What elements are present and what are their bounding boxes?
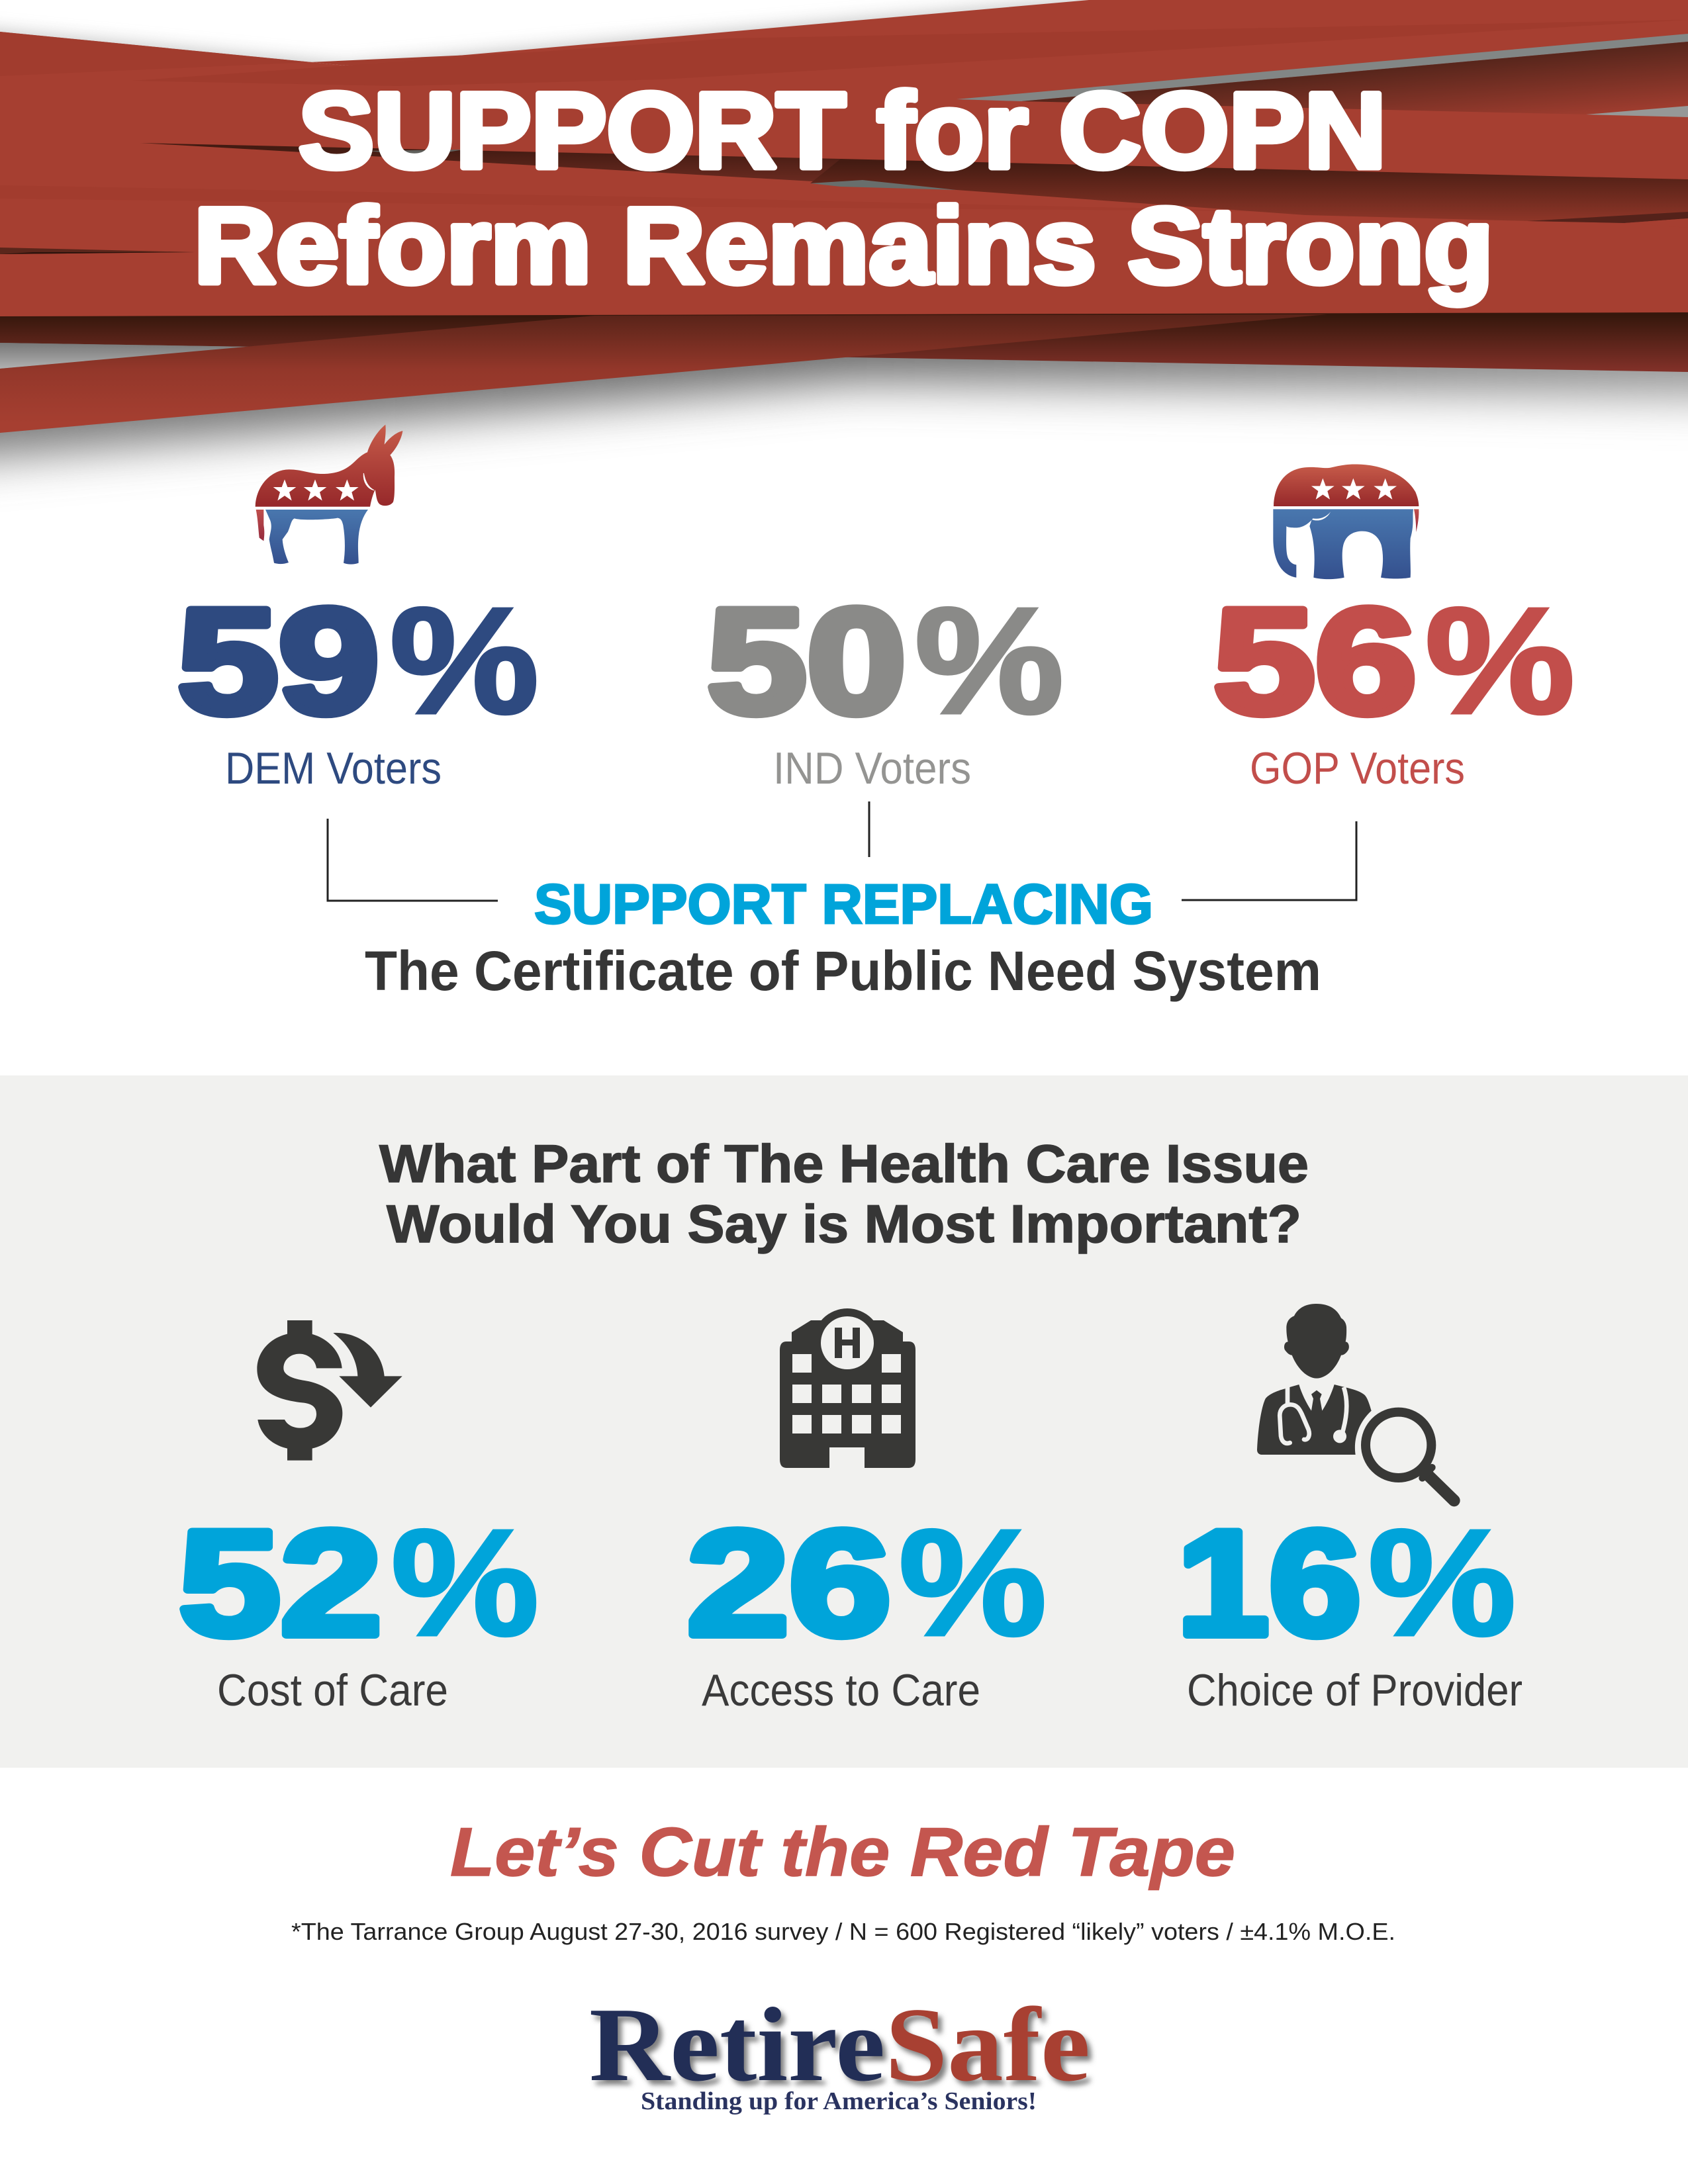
icon: hospital: [780, 1308, 915, 1468]
source footnote: *The Tarrance Group August 27-30, 2016 survey / N = 600 Registered “likely” voters / ±4.1% M.O.E.: [291, 1918, 1395, 1945]
stat: 16% choice of provider: [1177, 1499, 1523, 1715]
title line 2: Reform Remains Strong: [194, 186, 1493, 306]
stat: 50% IND voters: [707, 577, 1064, 794]
stat: 16% choice of provider: 16: [1177, 1499, 1361, 1666]
label: DEM Voters: DEM Voters: [225, 743, 442, 794]
diagonal lower ribbon: [0, 314, 1327, 433]
stat: 16% choice of provider: %: [1368, 1499, 1516, 1667]
stat: 52% cost of care: %: [391, 1499, 539, 1667]
dark ribbon middle: [810, 159, 1688, 223]
stat: 56% GOP voters: %: [1425, 577, 1575, 745]
heading: support replacing: SUPPORT REPLACING: [534, 873, 1153, 935]
stat: 50% IND voters: 50: [707, 577, 906, 745]
tagline: cut the red tape: Let’s Cut the Red Tape: [450, 1814, 1235, 1891]
stat: 26% access to care: [687, 1499, 1047, 1715]
icon: doctor with magnifying glass: [1257, 1304, 1454, 1500]
panel heading: Would You Say is Most Important?: [387, 1195, 1301, 1254]
panel heading: [379, 1134, 1309, 1254]
lower dark ribbon: [0, 312, 1688, 372]
stat: 59% DEM voters: 59: [177, 577, 379, 745]
label: IND Voters: IND Voters: [773, 743, 971, 794]
red base ribbons: [0, 0, 1688, 316]
header ribbon banner: [0, 0, 1688, 480]
title line 1: SUPPORT for COPN: [299, 71, 1386, 191]
stat: 26% access to care: 26: [687, 1499, 891, 1666]
stat: 59% DEM voters: [177, 577, 539, 794]
stat: 26% access to care: %: [899, 1499, 1047, 1667]
dark sliver behind title: [140, 143, 847, 183]
dark ribbon upper right: [1021, 42, 1688, 114]
subheading: certificate of public need: The Certificate of Public Need System: [365, 940, 1321, 1002]
label: Choice of Provider: Choice of Provider: [1187, 1665, 1523, 1715]
stat: 52% cost of care: 52: [179, 1499, 382, 1666]
label: GOP Voters: GOP Voters: [1250, 743, 1465, 794]
bracket connector lines: [328, 801, 1356, 901]
stat: 56% GOP voters: 56: [1213, 577, 1417, 745]
stat: 52% cost of care: [179, 1499, 539, 1715]
logo: RetireSafe: RetireSafe: [589, 1985, 1090, 2103]
panel: health care issue: [0, 1075, 1688, 1768]
stat: 59% DEM voters: %: [390, 577, 539, 745]
grey sliver top right: [957, 34, 1688, 101]
label: Access to Care: Access to Care: [702, 1665, 980, 1715]
icon: democratic donkey: [256, 425, 402, 565]
stat: 56% GOP voters: [1213, 577, 1575, 794]
icon: dollar with down arrow: [257, 1320, 402, 1461]
label: Cost of Care: Cost of Care: [217, 1665, 448, 1715]
dark left sliver: [0, 248, 195, 254]
stat: 50% IND voters: %: [915, 577, 1064, 745]
title: [194, 71, 1493, 306]
panel heading: What Part of The Health Care Issue: [379, 1134, 1309, 1194]
icon: republican elephant: [1273, 464, 1419, 579]
grey wedge left: [0, 343, 254, 369]
logo tagline: Standing up for America’s Seniors!: [641, 2087, 1037, 2115]
